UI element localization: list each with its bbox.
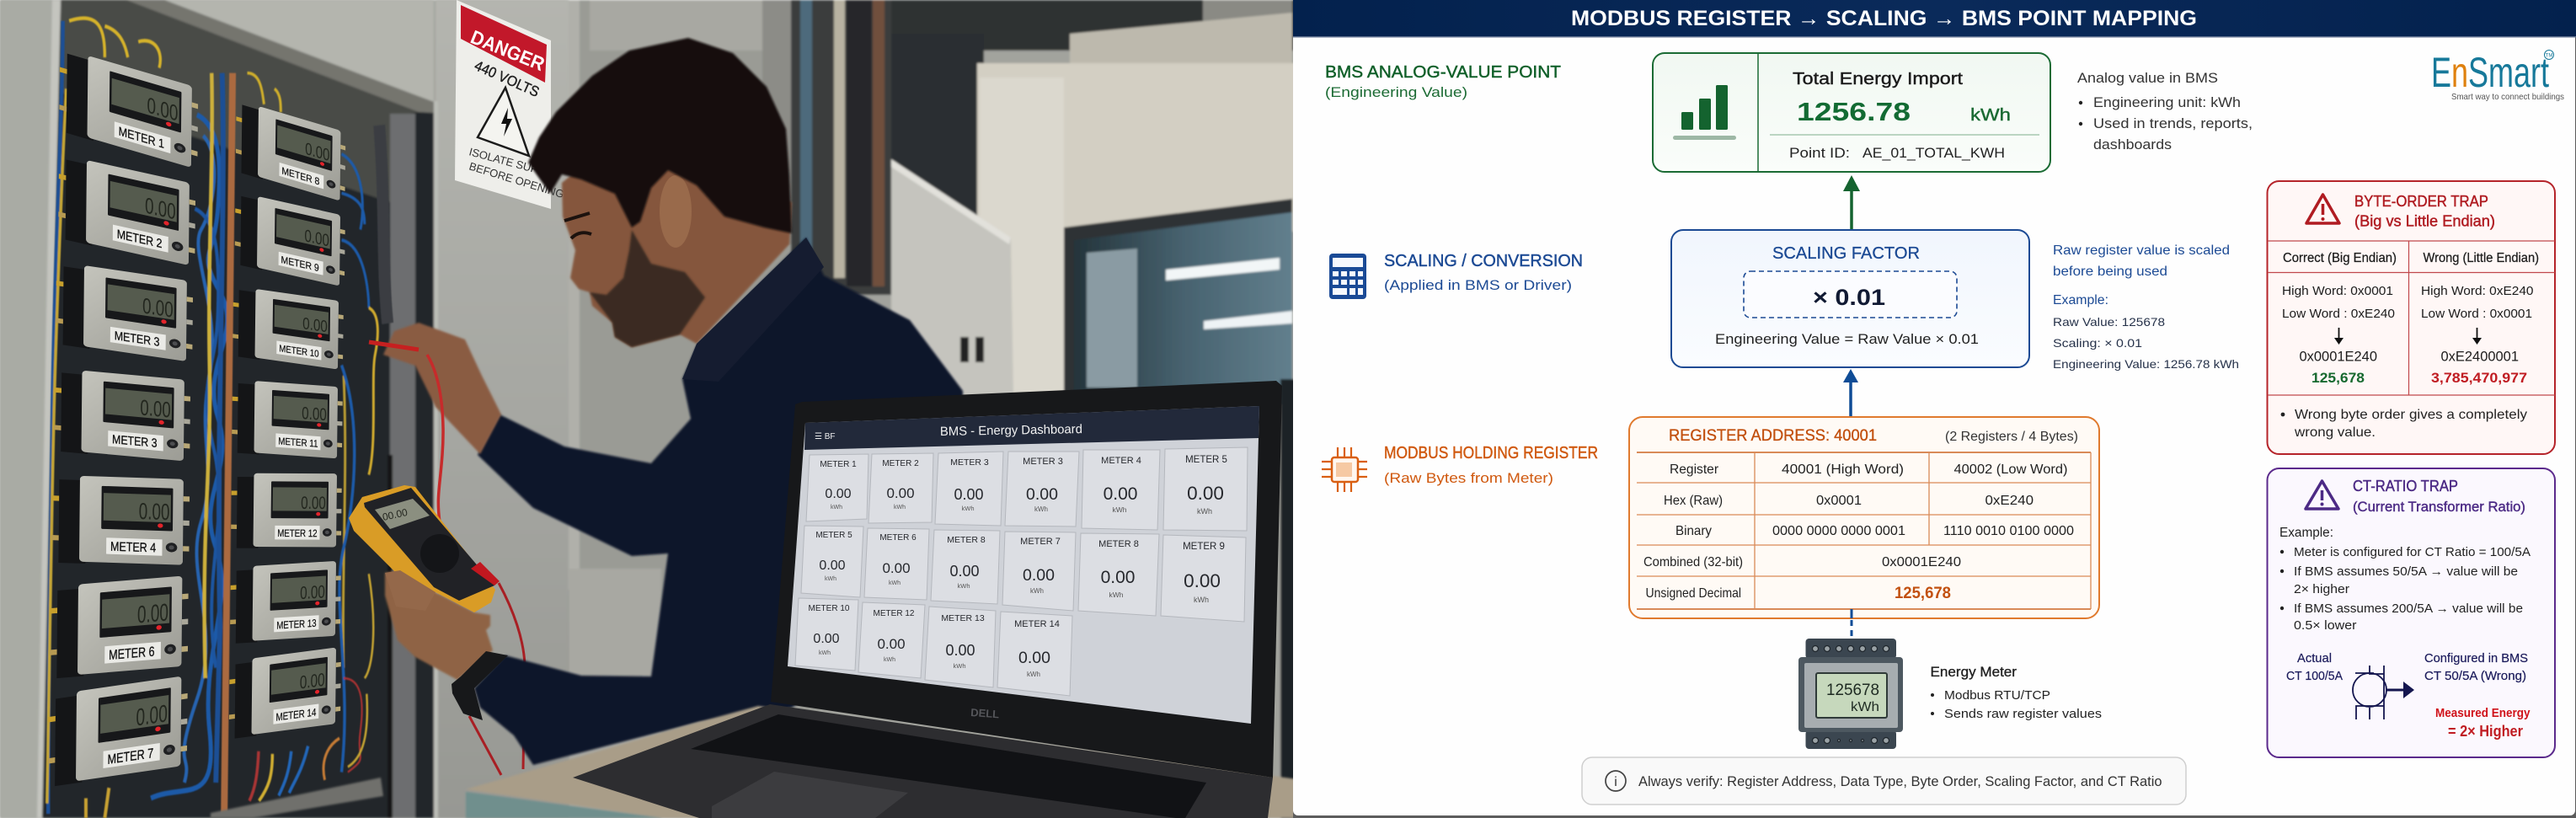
dashboard tile text: kWh [962, 505, 974, 512]
dashboard tile text [809, 455, 1227, 678]
meter 4: 0.00 [139, 499, 170, 526]
dashboard tile text: kWh [831, 505, 842, 511]
CT actual label [2286, 651, 2343, 683]
meter 7: 0.00 [136, 699, 168, 731]
meter 3 duplicate [54, 368, 190, 463]
panel: byte-order trap: (Big vs Little Endian) [2354, 212, 2495, 229]
dashboard tile text: 0.00 [1184, 570, 1221, 591]
meter 3 duplicate: METER 3 [112, 433, 158, 450]
thumb over multimeter [385, 570, 436, 611]
dashboard tile text: METER 1 [820, 460, 857, 469]
notes: energy meter: Modbus RTU/TCP [1944, 688, 2050, 703]
dashboard tile text: kWh [957, 582, 970, 590]
byte-order note: wrong value. [2294, 425, 2376, 440]
heading: Modbus holding register: (Raw Bytes from Meter) [1384, 470, 1553, 486]
dashboard tile text: kWh [894, 505, 906, 511]
dashboard tile text: METER 8 [947, 535, 986, 545]
meter 13 [230, 561, 341, 644]
notes: scaling example: Example: [2053, 293, 2108, 307]
panel: infographic background [1293, 0, 2576, 818]
dashboard tile text: kWh [1112, 505, 1127, 514]
icon: energy meter: 125678 [1826, 682, 1879, 699]
heading: scaling conversion [1329, 252, 1583, 299]
meter 3 duplicate: 0.00 [140, 396, 171, 423]
ear [660, 175, 692, 248]
icon: info: i [1614, 775, 1617, 789]
icon: energy meter [1798, 639, 1903, 749]
table text: Hex (Raw) [1664, 494, 1723, 508]
meter 6: 0.00 [137, 599, 168, 628]
danger sign: DANGER [468, 26, 548, 75]
dashboard tile text: kWh [889, 580, 901, 586]
CT configured label [2424, 651, 2528, 683]
panel: CT-ratio trap: CT-RATIO TRAP [2353, 478, 2458, 495]
callout: verification note: Always verify: Register Address, Data Type, Byte Order, Scaling Factor, and CT Ratio [1638, 773, 2162, 789]
meter 14: 0.00 [300, 669, 325, 692]
table [466, 706, 1297, 818]
dashboard tile text: kWh [1109, 591, 1124, 599]
meter 7: METER 7 [107, 745, 153, 767]
notes: analog value: dashboards [2093, 137, 2172, 152]
dashboard tile text: METER 6 [879, 533, 917, 543]
panel: byte-order trap [2268, 181, 2555, 454]
heading: BMS analog value point: (Engineering Value) [1325, 84, 1467, 100]
meter 9 [235, 191, 345, 289]
CT actual label: Actual [2297, 651, 2332, 666]
laptop [573, 381, 1282, 818]
table text: Register [1670, 462, 1719, 477]
panel: scaling factor [1671, 230, 2029, 367]
panel: CT-ratio trap: (Current Transformer Ratio) [2353, 499, 2525, 515]
photo background wall [0, 0, 1297, 818]
meter 10 [232, 286, 344, 372]
arrow: meter to register (dashed) [1850, 609, 1853, 639]
meter 14 [229, 647, 341, 740]
icon: calculator [1329, 254, 1366, 299]
dashboard tile text: 0.00 [886, 485, 915, 501]
panel: BMS point card [1653, 53, 2050, 172]
meter 2: 0.00 [145, 194, 176, 225]
CT actual label: CT 100/5A [2286, 669, 2343, 683]
dashboard tiles [795, 447, 1248, 696]
red probe and lead [369, 342, 419, 350]
notes: analog value [2077, 71, 2253, 152]
wrong column: 0xE2400001 [2441, 349, 2519, 364]
table text: 40001 (High Word) [1782, 462, 1904, 477]
byte-order note [2281, 408, 2527, 440]
danger sign: ISOLATE SUPPLY [468, 145, 559, 181]
dashboard tile text: 0.00 [1023, 566, 1055, 585]
panel: byte-order trap: BYTE-ORDER TRAP [2354, 193, 2488, 210]
dashboard tile text: METER 3 [950, 457, 989, 468]
dashboard tile text: 0.00 [954, 486, 984, 503]
table text: Combined (32-bit) [1643, 555, 1743, 569]
heading: scaling conversion: (Applied in BMS or Driver) [1384, 277, 1572, 293]
wrong column: High Word: 0xE240 [2421, 284, 2534, 298]
panel: scaling factor: SCALING FACTOR [1772, 244, 1920, 263]
dashboard tile text: kWh [1030, 587, 1044, 595]
icon: warning triangle [2306, 481, 2338, 509]
lower hand [385, 570, 493, 680]
measured energy result: Measured Energy [2435, 706, 2531, 720]
keyboard [691, 714, 1206, 818]
trackpad [712, 772, 908, 818]
meter 13: METER 13 [276, 617, 317, 631]
CT example text: Meter is configured for CT Ratio = 100/5A [2294, 545, 2531, 559]
meter 10: 0.00 [302, 313, 328, 336]
red test lead behind arm [469, 583, 525, 775]
dashboard tile text: 0.00 [1018, 649, 1050, 667]
panel: register table: REGISTER ADDRESS: 40001 [1669, 427, 1877, 445]
panel: register table: (2 Registers / 4 Bytes) [1945, 430, 2078, 444]
terminal rail [211, 778, 383, 818]
meters column right [229, 99, 345, 740]
table text: 40002 (Low Word) [1954, 462, 2067, 477]
meter 6 [50, 575, 189, 679]
correct column [2282, 251, 2397, 386]
wrong column: Wrong (Little Endian) [2423, 251, 2539, 265]
icon: chip [1322, 447, 1367, 492]
title bar [1293, 0, 2576, 37]
meter 3: METER 3 [115, 329, 159, 349]
screen title bar [804, 406, 1259, 450]
dashboard tile text: kWh [1197, 507, 1212, 516]
meter 2: METER 2 [117, 227, 162, 251]
panel: BMS point card: AE_01_TOTAL_KWH [1863, 145, 2005, 161]
panel: BMS point card: kWh [1970, 106, 2011, 125]
correct column: Low Word : 0xE240 [2282, 307, 2395, 321]
dashboard tile text: kWh [1027, 671, 1040, 678]
CT example text: Example: [2279, 526, 2333, 540]
danger sign [455, 0, 565, 209]
notes: analog value: Used in trends, reports, [2093, 116, 2253, 131]
CT example text: If BMS assumes 200/5A → value will be [2294, 601, 2523, 616]
danger sign: BEFORE OPENING [468, 160, 565, 200]
dashboard tile text: METER 4 [1101, 456, 1141, 466]
danger sign: 440 VOLTS [472, 57, 542, 100]
table text: 1110 0010 0100 0000 [1943, 524, 2074, 538]
eye and brow [564, 213, 591, 238]
wrong column [2421, 251, 2539, 386]
dashboard tile text: kWh [819, 650, 831, 656]
arrow: scaling to BMS [1843, 175, 1860, 230]
correct column: 0x0001E240 [2300, 349, 2377, 364]
icon: info [1606, 771, 1626, 791]
meter 11: METER 11 [278, 435, 318, 450]
wrong column: 3,785,470,977 [2431, 370, 2527, 386]
dashboard tile text: METER 10 [809, 604, 850, 613]
panel: register table [1629, 417, 2099, 618]
meter 13: 0.00 [300, 581, 325, 603]
dashboard tile text: 0.00 [819, 559, 846, 573]
notes: energy meter: Energy Meter [1931, 664, 2017, 680]
heading: Modbus holding register: MODBUS HOLDING REGISTER [1384, 444, 1598, 462]
icon: current transformer [2353, 666, 2414, 719]
meter 4 [51, 475, 190, 567]
electrical cabinet [0, 0, 569, 818]
meters column left [47, 47, 198, 787]
meter 3 [56, 261, 193, 364]
notes: scaling example: Raw register value is scaled [2053, 243, 2230, 258]
heading: BMS analog value point: BMS ANALOG-VALUE POINT [1325, 63, 1561, 82]
dashboard tile text: METER 8 [1098, 539, 1139, 549]
dashboard tile text: METER 12 [874, 609, 915, 618]
panel: CT-ratio trap [2268, 468, 2555, 757]
notes: scaling example: Scaling: × 0.01 [2053, 336, 2142, 350]
CT example text: 0.5× lower [2294, 618, 2357, 633]
laptop brand: DELL [970, 706, 1000, 720]
panel: scaling factor: × 0.01 [1813, 285, 1885, 310]
measured energy result [2435, 706, 2531, 740]
panel: BMS point card: Point ID: [1789, 145, 1850, 161]
meter 12: 0.00 [301, 493, 326, 513]
table grid [1637, 452, 2091, 609]
meter 14: METER 14 [275, 706, 317, 724]
meter 11: 0.00 [302, 404, 327, 425]
notes: analog value: Analog value in BMS [2077, 71, 2218, 86]
table text: 125,678 [1895, 585, 1951, 602]
dashboard tile text: METER 5 [1185, 455, 1227, 465]
beard [590, 230, 705, 347]
meter 1 [59, 47, 198, 171]
screen [788, 406, 1259, 724]
measured energy result: = 2× Higher [2448, 723, 2523, 740]
dashboard tile text: kWh [954, 662, 965, 670]
heading: Modbus holding register [1322, 444, 1598, 492]
dashboard tile text: METER 13 [941, 613, 985, 623]
meter 8: METER 8 [281, 164, 319, 187]
meter 4: METER 4 [110, 539, 156, 555]
technician [349, 38, 963, 775]
meter 10: METER 10 [279, 342, 319, 360]
dashboard tile text: kWh [1034, 505, 1048, 513]
CT configured label: CT 50/5A (Wrong) [2424, 669, 2526, 683]
dashboard tile text: METER 3 [1023, 457, 1063, 467]
meter 8: 0.00 [305, 139, 330, 165]
title bar: MODBUS REGISTER → SCALING → BMS POINT MAPPING [1571, 7, 2197, 30]
table text: Unsigned Decimal [1646, 586, 1741, 601]
dashboard tile text: kWh [1194, 596, 1209, 604]
dashboard tile text: 0.00 [945, 642, 975, 659]
correct column: 125,678 [2311, 370, 2365, 386]
dashboard tile text: METER 2 [882, 459, 919, 468]
meter 7 [47, 676, 188, 787]
CT example text [2279, 526, 2531, 633]
dashboard tile text: 0.00 [877, 636, 906, 652]
upper hand [383, 323, 501, 454]
table text: 0xE240 [1985, 494, 2034, 508]
heading: BMS analog value point [1325, 63, 1561, 100]
shirt [474, 238, 963, 765]
dashboard tile text: METER 14 [1014, 619, 1060, 629]
laptop base [573, 704, 1273, 818]
table text: 0x0001 [1816, 494, 1862, 508]
meter 1: METER 1 [119, 124, 164, 151]
panel: BMS point card: Total Energy Import [1793, 70, 1964, 88]
dashboard tile text: METER 9 [1183, 542, 1225, 552]
meter 1: 0.00 [147, 92, 179, 126]
meter 8 [236, 99, 345, 204]
callout: verification note [1582, 757, 2186, 805]
comparison grid [2268, 241, 2555, 395]
notes: analog value: Engineering unit: kWh [2093, 95, 2241, 110]
icon: bar chart [1673, 85, 1736, 140]
table text [1643, 462, 2074, 602]
meter 12: METER 12 [277, 527, 318, 539]
meter 9: METER 9 [281, 254, 319, 274]
notes: scaling example: before being used [2053, 265, 2167, 279]
dashboard tile text: kWh [884, 657, 895, 663]
table text: 0000 0000 0000 0001 [1772, 524, 1905, 538]
meter 12 [231, 473, 342, 548]
wrong column: Low Word : 0x0001 [2421, 307, 2532, 321]
meter 9: 0.00 [304, 226, 329, 250]
notes: scaling example: Engineering Value: 1256.78 kWh [2053, 357, 2239, 371]
screen menu: ☰ BF [815, 432, 836, 441]
panel: scaling factor: Engineering Value = Raw Value × 0.01 [1715, 331, 1979, 347]
notes: energy meter: Sends raw register values [1944, 707, 2102, 721]
CT configured label: Configured in BMS [2424, 651, 2528, 666]
correct column: Correct (Big Endian) [2283, 251, 2397, 265]
correct column: High Word: 0x0001 [2282, 284, 2393, 298]
dashboard tile text: 0.00 [1187, 483, 1224, 504]
notes: scaling example: Raw Value: 125678 [2053, 315, 2165, 329]
notes: scaling example [2053, 243, 2239, 371]
arrow: register to scaling [1843, 369, 1858, 417]
CT example text: If BMS assumes 50/5A → value will be [2294, 564, 2518, 579]
meter 3: 0.00 [142, 294, 174, 323]
icon: warning triangle [2306, 195, 2339, 223]
meter 2 [58, 154, 195, 269]
table text: 0x0001E240 [1882, 555, 1961, 569]
dashboard tile text: 0.00 [882, 560, 911, 576]
multimeter [349, 485, 500, 612]
hair [528, 38, 792, 233]
meter 11 [232, 379, 343, 460]
meter 6: METER 6 [109, 644, 155, 663]
byte-order note: Wrong byte order gives a completely [2295, 408, 2527, 422]
table text: Binary [1675, 524, 1712, 538]
icon: energy meter: kWh [1851, 700, 1879, 714]
heading: scaling conversion: SCALING / CONVERSION [1384, 252, 1583, 270]
dashboard tile text: 0.00 [825, 487, 852, 501]
collar [682, 238, 824, 382]
dashboard tile text: kWh [825, 576, 836, 582]
dashboard tile text: 0.00 [949, 563, 980, 580]
panel: technician photo [0, 0, 1297, 818]
dashboard tile text: 0.00 [813, 632, 840, 646]
multimeter: 00.00 [382, 506, 409, 523]
neck and face [562, 160, 792, 347]
laptop lid [771, 381, 1282, 778]
dashboard tile text: 0.00 [1026, 485, 1058, 504]
CT example text: 2× higher [2294, 582, 2349, 596]
dashboard tile text: METER 7 [1020, 537, 1061, 547]
notes: energy meter [1931, 664, 2102, 721]
wiring bundles [47, 19, 387, 818]
dashboard tile text: 0.00 [1104, 484, 1137, 504]
panel: BMS point card: 1256.78 [1797, 97, 1911, 126]
watch [452, 651, 508, 720]
dashboard tile text: 0.00 [1101, 568, 1135, 587]
dashboard tile text: METER 5 [815, 531, 852, 540]
logo: EnSmart: Smart way to connect buildings [2451, 92, 2564, 102]
logo: EnSmart: TM [2546, 54, 2552, 59]
screen title: BMS - Energy Dashboard [940, 422, 1082, 439]
